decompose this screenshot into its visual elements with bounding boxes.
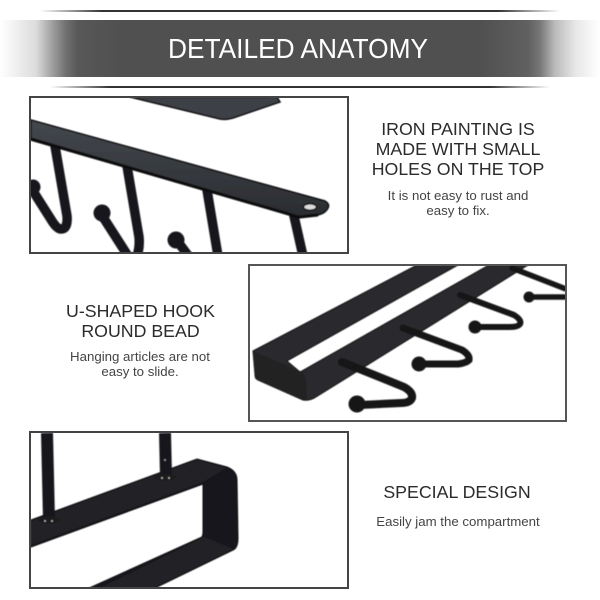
frame end xyxy=(31,459,238,589)
text block: iron painting: IRON PAINTING IS xyxy=(381,119,535,139)
text block: u-shaped hook: U-SHAPED HOOK xyxy=(66,301,215,321)
text block: iron painting xyxy=(372,119,544,218)
round beads xyxy=(348,292,534,412)
round beads xyxy=(26,180,184,248)
main rail xyxy=(31,120,329,217)
title: DETAILED ANATOMY xyxy=(168,33,428,64)
text block: u-shaped hook: Hanging articles are not xyxy=(70,349,210,364)
text block: u-shaped hook xyxy=(66,301,215,379)
text block: u-shaped hook: ROUND BEAD xyxy=(81,321,200,341)
text block: iron painting: easy to fix. xyxy=(426,203,490,218)
panel: middle photo of hooks xyxy=(249,265,566,421)
mounting hole xyxy=(304,204,316,210)
header banner xyxy=(0,10,600,88)
vertical stems xyxy=(47,433,166,520)
panel: top photo of rail with holes xyxy=(26,97,348,258)
text block: special design xyxy=(376,482,540,529)
hooks xyxy=(33,146,303,258)
text block: iron painting: HOLES ON THE TOP xyxy=(372,159,544,179)
text block: special design: SPECIAL DESIGN xyxy=(383,482,531,502)
upper rail piece xyxy=(130,97,280,119)
weld highlights xyxy=(44,459,170,522)
text block: special design: Easily jam the compartment xyxy=(376,514,540,529)
rack frame xyxy=(253,265,528,400)
text block: u-shaped hook: easy to slide. xyxy=(101,364,179,379)
hooks xyxy=(342,268,566,405)
panel: bottom photo of frame end xyxy=(30,432,348,589)
weld bases xyxy=(38,474,176,524)
text block: iron painting: It is not easy to rust and xyxy=(388,188,528,203)
text block: iron painting: MADE WITH SMALL xyxy=(376,139,540,159)
